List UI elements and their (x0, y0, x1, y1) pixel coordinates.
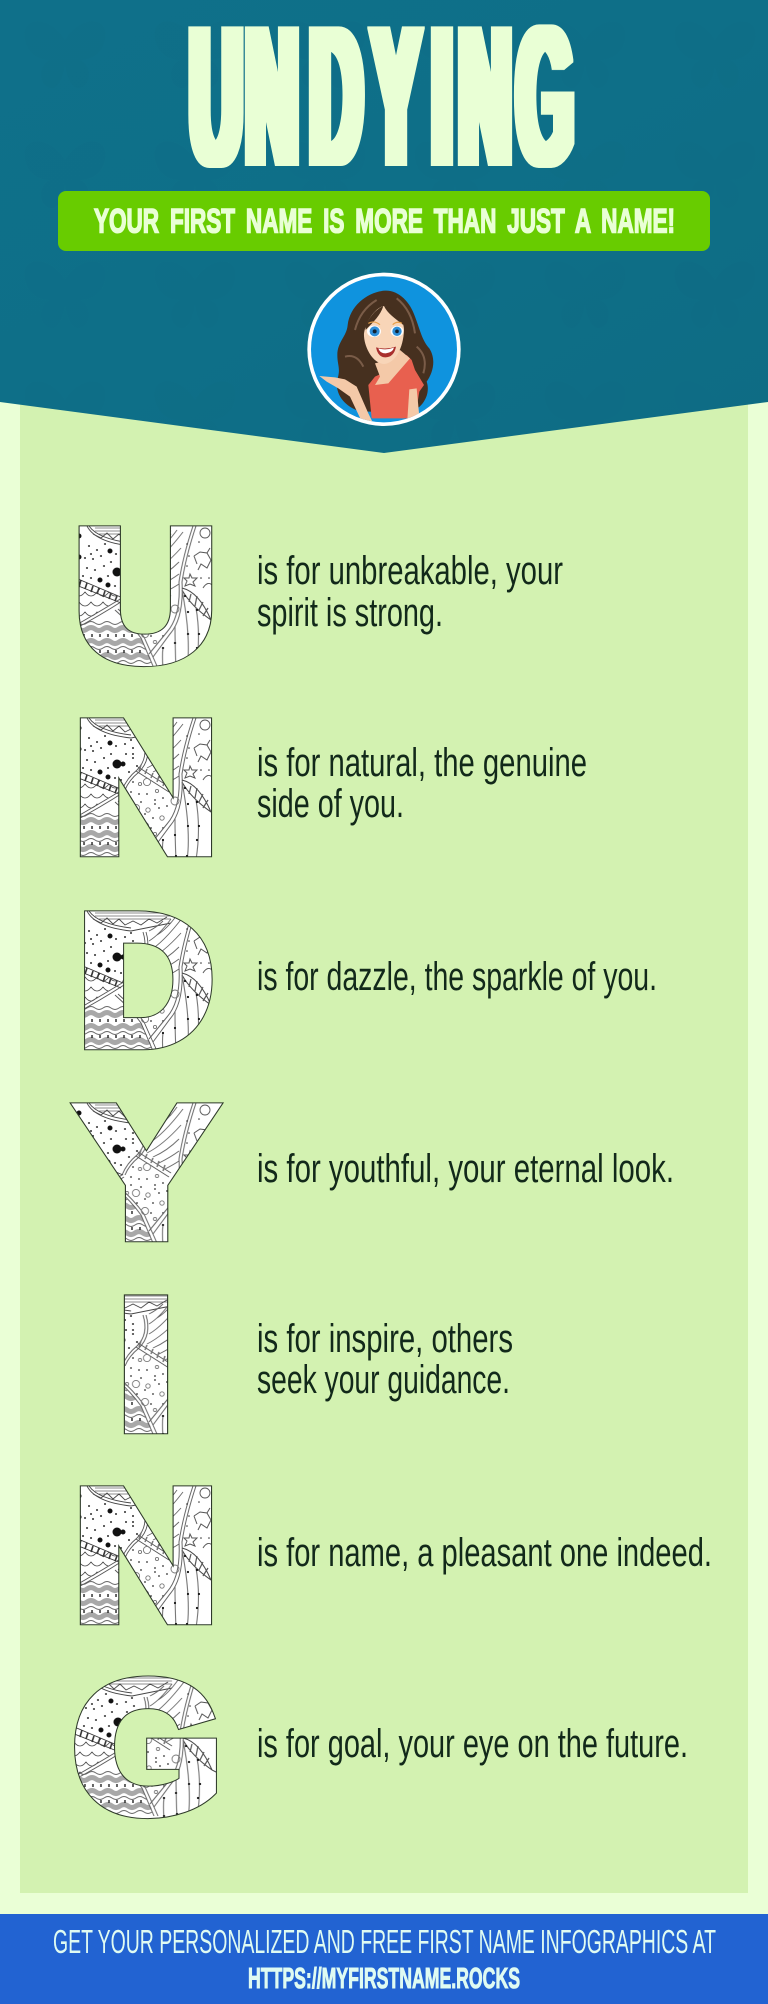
letter Y illustration: Y (78, 1069, 215, 1276)
subtitle banner (58, 191, 710, 251)
letter N illustration: N (73, 685, 219, 891)
text: U line: spirit is strong. (257, 591, 443, 635)
text: U line (257, 549, 563, 635)
letter I illustration: I (117, 1260, 175, 1467)
text: N line (257, 741, 587, 826)
footer: HTTPS://MYFIRSTNAME.ROCKS (248, 1963, 520, 1995)
text: N line: is for natural, the genuine (257, 741, 587, 785)
text: I line: seek your guidance. (257, 1358, 510, 1402)
letter N illustration (second): N (73, 1453, 219, 1659)
letter I illustration: I (117, 1260, 175, 1467)
text: N line: side of you. (257, 782, 404, 826)
text: I line (257, 1317, 513, 1402)
letter U illustration: U (73, 492, 218, 698)
letter U illustration: U (73, 492, 218, 698)
letter D illustration: D (78, 877, 214, 1084)
panel: letters background (20, 380, 748, 1893)
letter G illustration: G (73, 1643, 222, 1850)
letter D illustration: D (78, 877, 214, 1084)
text: I line: is for inspire, others (257, 1317, 513, 1361)
footer (0, 1914, 768, 2004)
letter N illustration (second): N (73, 1453, 219, 1659)
letter G illustration: G (73, 1643, 222, 1850)
letter N illustration: N (73, 685, 219, 891)
letter Y illustration: Y (78, 1069, 215, 1276)
header banner (0, 0, 768, 453)
icon: avatar portrait (307, 273, 461, 426)
text: U line: is for unbreakable, your (257, 549, 563, 593)
